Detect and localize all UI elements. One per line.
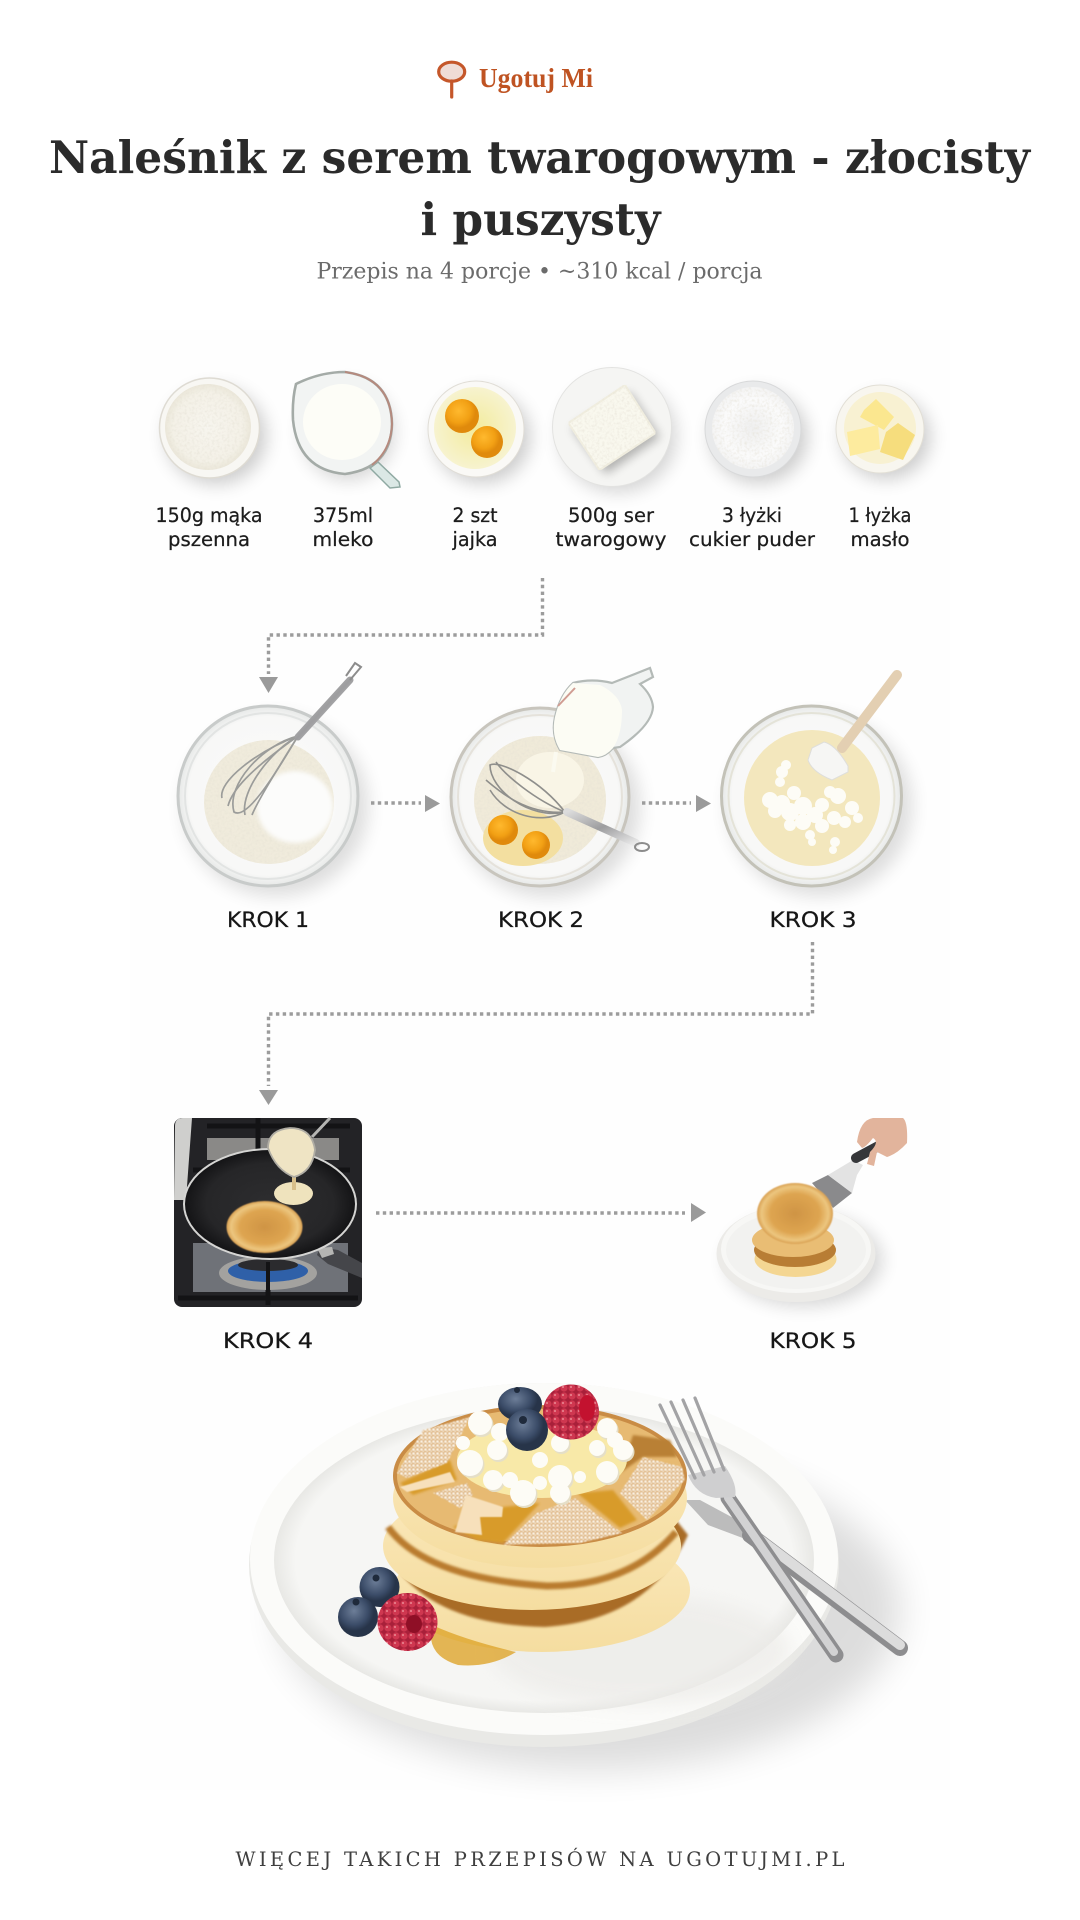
ingredient labels: 2 szt <box>452 504 498 527</box>
label: KROK 5: KROK 5 <box>770 1329 856 1354</box>
panel: step 4 <box>174 1118 362 1354</box>
syrup pool <box>431 1625 516 1665</box>
icon: bowl with batter cheese and spatula <box>722 675 912 896</box>
ingredient labels: 500g ser <box>568 504 655 527</box>
title: i puszysty <box>420 193 662 246</box>
plate shadow <box>280 1450 900 1770</box>
ingredient: milk jug <box>293 372 400 488</box>
ingredient labels: 150g mąka <box>156 504 262 527</box>
panel: ingredients <box>156 368 930 551</box>
icon: bowl with flour eggs whisk and milk <box>451 668 653 897</box>
arrow: ingredients to step 1 <box>259 578 542 693</box>
ingredient labels: mleko <box>312 528 374 551</box>
ingredient: cottage cheese <box>552 368 676 492</box>
ingredient labels: masło <box>850 528 910 551</box>
bottom pancake <box>394 1500 690 1652</box>
icon: pancakes on plate with spatula <box>716 1118 907 1306</box>
arrow: step 3 to 4 <box>259 942 812 1105</box>
berries on plate <box>338 1567 438 1651</box>
pancake stack <box>383 1405 690 1665</box>
logo: Ugotuj Mi <box>439 62 593 97</box>
logo wordmark: Ugotuj Mi <box>479 63 593 93</box>
arrow: step 2 to 3 <box>642 795 711 812</box>
ingredient: butter <box>836 385 930 479</box>
middle pancake <box>383 1482 681 1610</box>
ingredient: powdered sugar <box>705 381 807 483</box>
ingredient labels: jajka <box>452 528 498 551</box>
cutlery <box>660 1398 900 1655</box>
ingredient labels: 1 łyżka <box>848 504 912 527</box>
syrup <box>400 1435 677 1543</box>
top pancake <box>393 1405 687 1568</box>
icon: bowl with flour and sugar <box>178 663 368 896</box>
ingredient labels <box>156 504 912 551</box>
title: Naleśnik z serem twarogowym - złocisty <box>49 131 1032 184</box>
ingredient: flour <box>160 378 266 484</box>
ingredient: eggs <box>428 381 530 483</box>
panel: step 5 <box>716 1118 907 1354</box>
cottage cheese <box>456 1411 634 1508</box>
arrow: step 4 to 5 <box>376 1203 706 1222</box>
footer: WIĘCEJ TAKICH PRZEPISÓW NA UGOTUJMI.PL <box>236 1846 845 1871</box>
powdered sugar patches <box>397 1417 685 1545</box>
arrow: step 1 to 2 <box>371 795 440 812</box>
ingredient labels: 375ml <box>313 504 373 527</box>
title <box>49 131 1032 246</box>
icon: spoon <box>439 62 465 97</box>
plate <box>249 1383 839 1747</box>
label: KROK 4: KROK 4 <box>223 1329 313 1354</box>
panel: final dish <box>249 1383 900 1770</box>
fork <box>660 1398 836 1655</box>
ingredient labels: 3 łyżki <box>722 504 782 527</box>
ingredient labels: cukier puder <box>689 528 816 551</box>
ingredient labels: twarogowy <box>556 528 666 551</box>
label: KROK 2: KROK 2 <box>498 908 584 933</box>
panel: step 2 <box>451 668 653 933</box>
ingredient labels: pszenna <box>168 528 250 551</box>
label: KROK 3: KROK 3 <box>770 908 856 933</box>
panel: step 3 <box>722 675 912 933</box>
label: KROK 1: KROK 1 <box>227 908 309 933</box>
berries on top <box>498 1384 599 1451</box>
knife <box>685 1500 900 1648</box>
subtitle: Przepis na 4 porcje • ~310 kcal / porcja <box>316 260 762 284</box>
icon: pan on gas stove <box>174 1118 362 1307</box>
drizzle <box>400 1472 503 1535</box>
panel: step 1 <box>178 663 368 933</box>
